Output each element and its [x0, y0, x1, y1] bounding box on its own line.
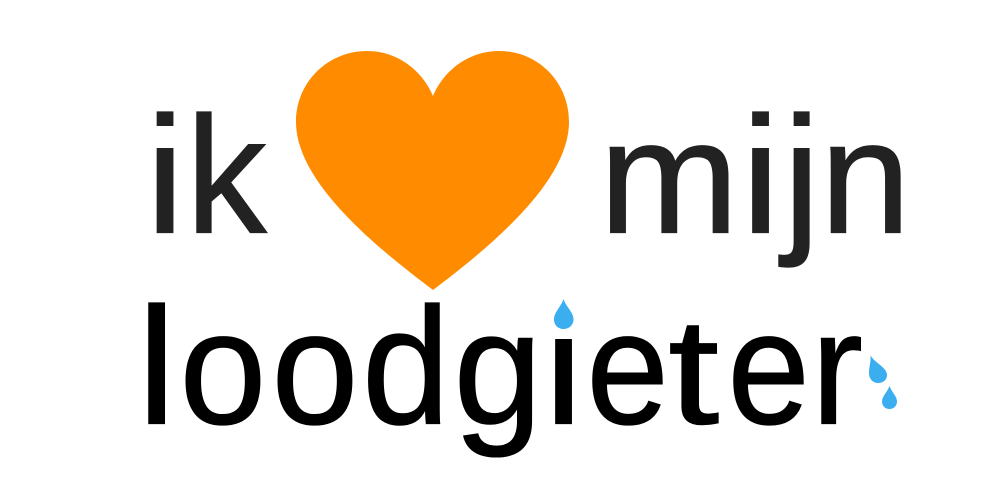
- word: mijn: j: [778, 83, 820, 268]
- word: ik: k: [186, 82, 268, 268]
- word: mijn: [599, 83, 911, 268]
- word: loodgieter: g: [454, 278, 542, 458]
- icon: small falling water drop: [882, 386, 897, 409]
- word: loodgieter: t: [668, 286, 719, 456]
- word: loodgieter: o: [272, 277, 358, 458]
- word: mijn: i: [741, 83, 780, 268]
- word: ik: i: [146, 83, 185, 268]
- word: ik: [146, 82, 268, 268]
- word: loodgieter: o: [180, 277, 266, 458]
- word: loodgieter: l: [137, 274, 176, 459]
- word: mijn: m: [599, 87, 739, 267]
- word: loodgieter: i: [544, 277, 583, 458]
- word: mijn: n: [820, 87, 911, 267]
- icon: orange heart: [296, 51, 569, 290]
- word: loodgieter: e: [586, 278, 669, 458]
- icon: large falling water drop: [869, 355, 887, 383]
- word: loodgieter: [137, 274, 863, 459]
- word: loodgieter: e: [728, 278, 810, 458]
- word: loodgieter: r: [811, 277, 863, 458]
- icon: water drop on the i: [554, 299, 574, 329]
- word: loodgieter: d: [362, 274, 450, 459]
